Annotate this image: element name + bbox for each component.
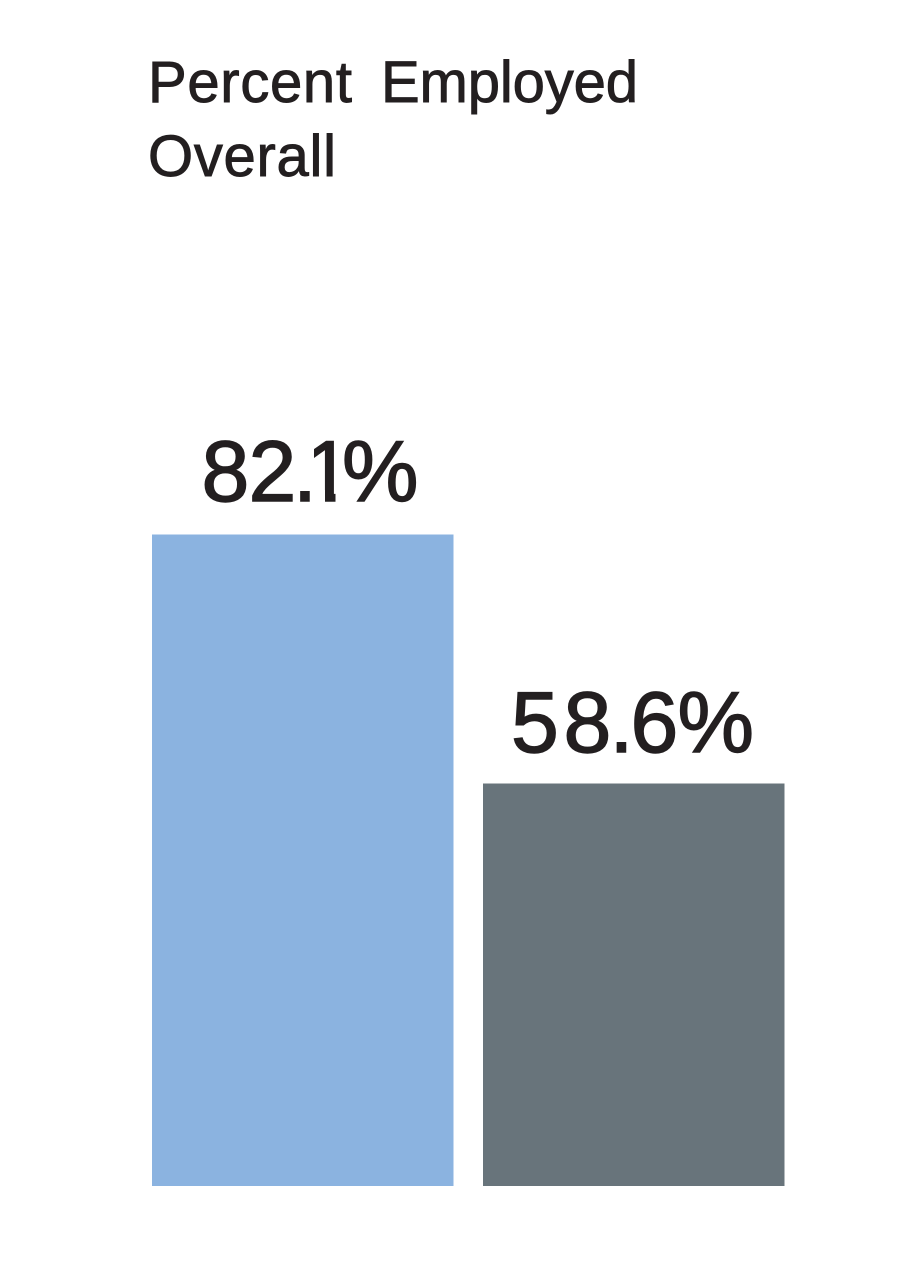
value label: 82.1%: 82. <box>202 424 317 520</box>
value label: 82.1%: 1 <box>304 424 352 520</box>
value label: 82.1% <box>204 440 416 503</box>
chart title <box>148 50 638 189</box>
value label: 82.1%: % <box>342 424 418 520</box>
chart title: Employed <box>381 50 638 115</box>
bar: 58.6% slate <box>483 784 784 1186</box>
bar: 82.1% blue <box>152 534 454 1186</box>
chart title: Overall <box>148 124 336 189</box>
value label: 58.6%: 58.6% <box>511 675 754 771</box>
chart title: Percent <box>148 50 352 115</box>
